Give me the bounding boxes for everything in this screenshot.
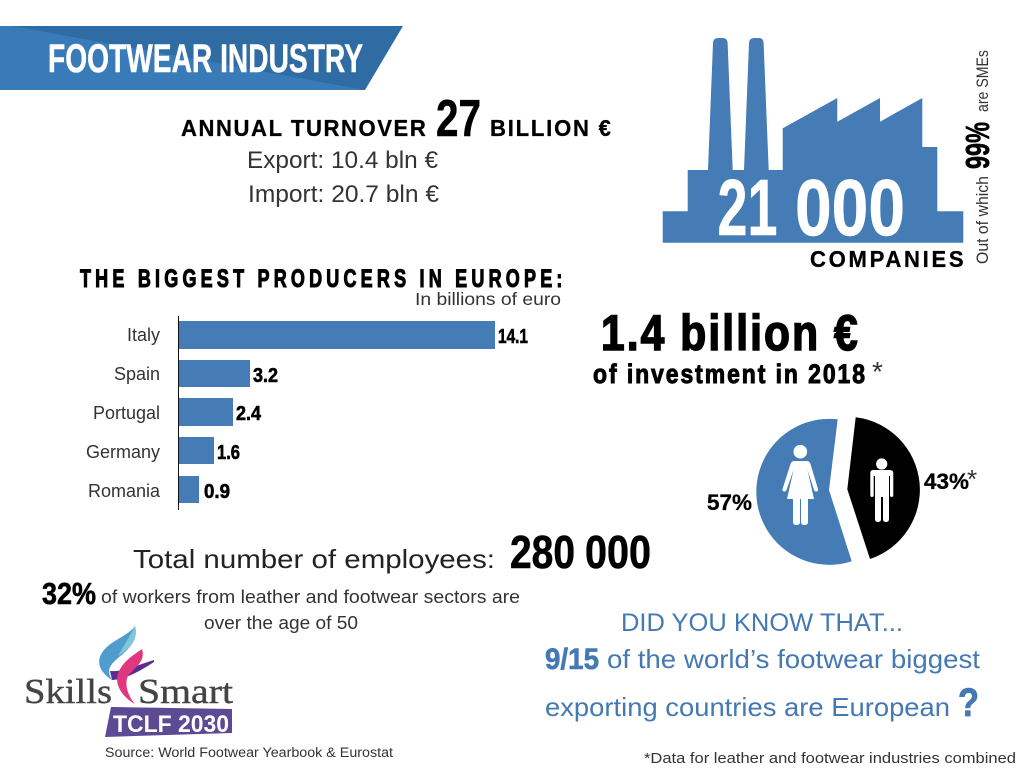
workers over 50 note: 32% — [42, 576, 96, 611]
icon: factory with company count: 21 — [718, 163, 778, 252]
did you know callout: DID YOU KNOW THAT... — [621, 609, 903, 637]
SMEs share rotated note: Out of which — [973, 176, 992, 264]
bar chart: Italy — [127, 325, 160, 345]
bar chart: 14.1 — [498, 326, 528, 348]
SMEs share rotated note — [959, 50, 996, 264]
investment callout: * — [872, 356, 883, 387]
logo: Skills Smart TCLF 2030: TCLF 2030 — [113, 711, 229, 738]
SMEs share rotated note: 99% — [959, 122, 996, 169]
export and import figures — [247, 147, 440, 208]
did you know callout — [545, 609, 981, 725]
SMEs share rotated note: are SMEs — [973, 50, 992, 112]
did you know callout: ? — [958, 681, 979, 725]
total employees: Total number of employees: — [133, 544, 495, 574]
title banner: FOOTWEAR INDUSTRY — [48, 37, 363, 81]
did you know callout: of the world’s footwear biggest — [607, 644, 981, 674]
bar chart subtitle: In billions of euro — [415, 289, 561, 309]
bar chart: 0.9 — [204, 481, 230, 503]
bar chart: 3.2 — [253, 365, 278, 387]
total employees: 280 — [510, 526, 575, 578]
logo: Skills Smart TCLF 2030: Smart — [138, 672, 233, 711]
bar chart: Spain — [114, 364, 160, 384]
bar chart: Romania — [88, 481, 161, 501]
logo: Skills Smart TCLF 2030: Skills — [24, 672, 112, 711]
annual turnover heading: BILLION € — [490, 116, 611, 141]
gender pie chart: 43% — [924, 469, 969, 494]
export and import figures: Import: 20.7 bln € — [248, 181, 440, 208]
icon: factory with company count — [663, 38, 963, 252]
investment callout: of investment in 2018 — [593, 359, 865, 389]
bar chart heading: THE BIGGEST PRODUCERS IN EUROPE: — [80, 264, 562, 293]
bar chart: 1.6 — [217, 442, 240, 464]
total employees: 000 — [585, 526, 651, 578]
did you know callout: exporting countries are European — [545, 692, 950, 722]
title banner — [0, 26, 403, 90]
investment callout: 1.4 billion € — [601, 305, 858, 361]
workers over 50 note: of workers from leather and footwear sectors are — [101, 586, 520, 607]
export and import figures: Export: 10.4 bln € — [247, 147, 439, 174]
annual turnover heading: ANNUAL TURNOVER — [181, 116, 426, 141]
icon: man — [870, 458, 893, 522]
gender pie chart — [707, 417, 977, 565]
annual turnover heading: 27 — [436, 90, 481, 148]
source note: Source: World Footwear Yearbook & Eurostat — [105, 745, 393, 760]
bar chart — [86, 316, 528, 510]
footnote: *Data for leather and footwear industries combined — [644, 750, 1016, 767]
bar chart: Portugal — [93, 403, 160, 423]
icon: woman — [782, 445, 818, 525]
gender pie chart: 57% — [707, 490, 752, 515]
annual turnover heading — [181, 90, 611, 148]
investment callout — [593, 305, 883, 389]
bar chart: 2.4 — [236, 403, 262, 425]
gender pie chart: * — [967, 464, 977, 494]
total employees — [133, 526, 651, 578]
workers over 50 note — [42, 576, 520, 633]
logo: Skills Smart TCLF 2030 — [24, 626, 233, 738]
bar chart: Germany — [86, 442, 160, 462]
companies label: COMPANIES — [810, 247, 964, 272]
did you know callout: 9/15 — [545, 643, 599, 676]
icon: factory with company count: 000 — [795, 163, 905, 252]
workers over 50 note: over the age of 50 — [204, 612, 358, 633]
